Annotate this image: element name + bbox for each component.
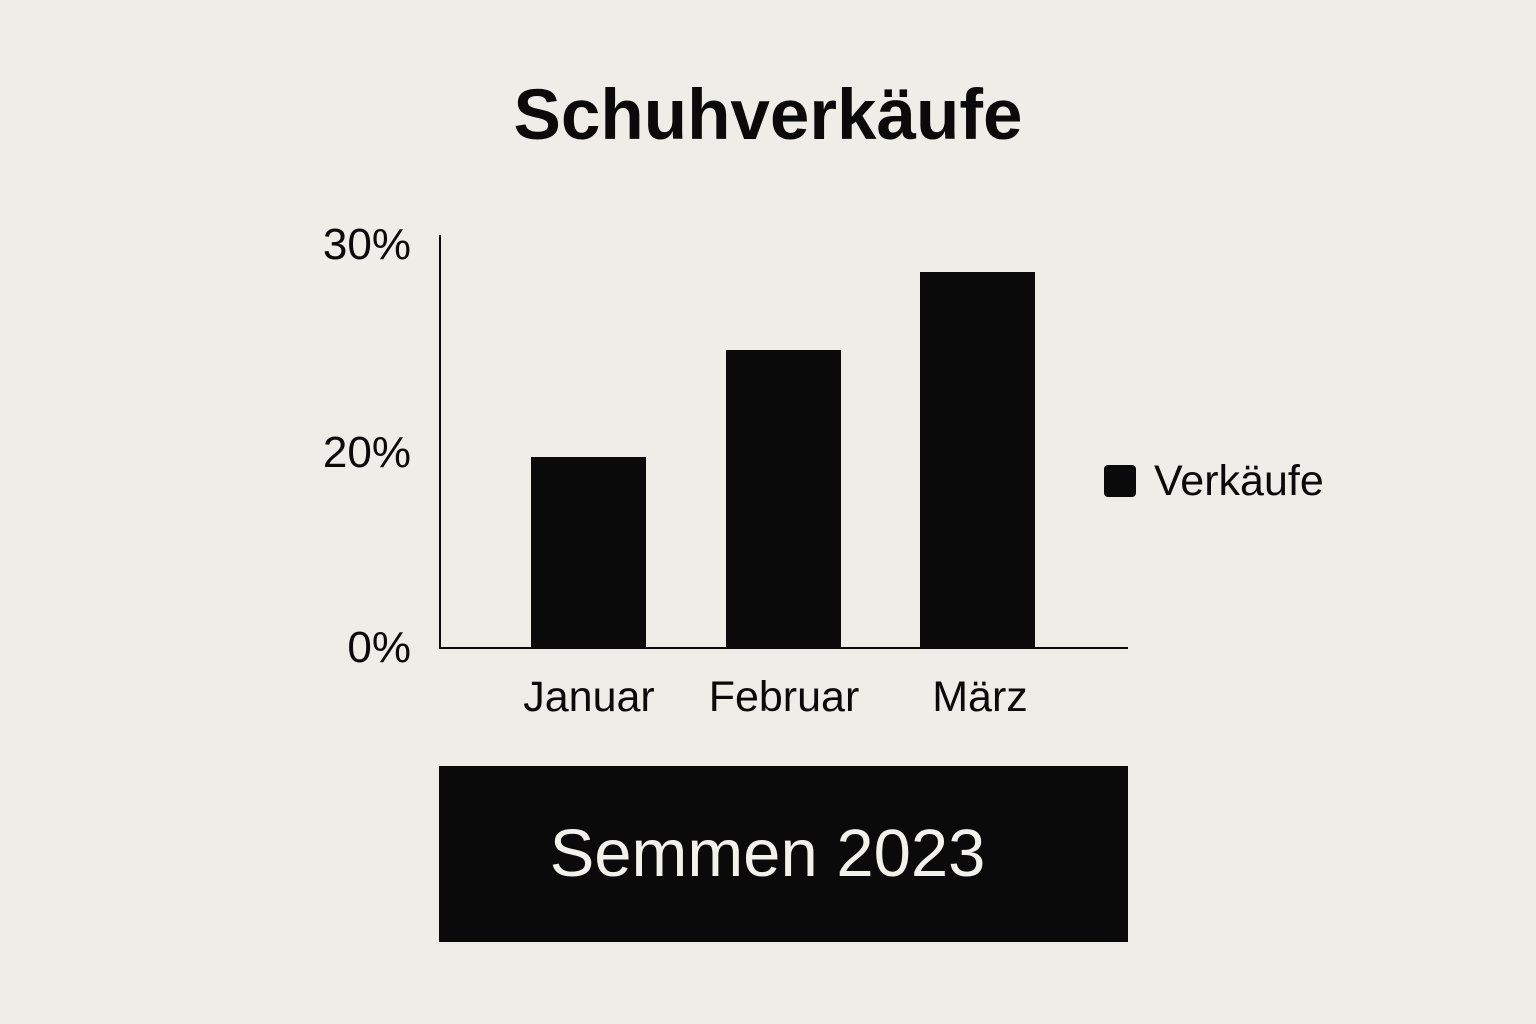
y label: 30%: 30% [323,220,411,269]
y axis line [439,235,441,649]
legend [1104,457,1324,505]
legend swatch [1104,465,1136,497]
x label: Januar: Januar [523,673,655,721]
bar: März [920,272,1035,648]
bar chart [323,220,1128,721]
banner: Semmen 2023: Semmen 2023 [550,816,985,891]
y label: 20%: 20% [323,428,411,477]
legend text: Verkäufe [1154,457,1324,505]
title: Schuhverkäufe [513,76,1023,155]
bar: Januar [531,457,646,648]
y label: 0%: 0% [347,623,411,672]
bar: Februar [726,350,841,648]
x label: Februar: Februar [709,673,859,721]
x label: März: März [932,673,1028,721]
x axis line [439,647,1128,649]
banner: Semmen 2023 [439,766,1128,942]
